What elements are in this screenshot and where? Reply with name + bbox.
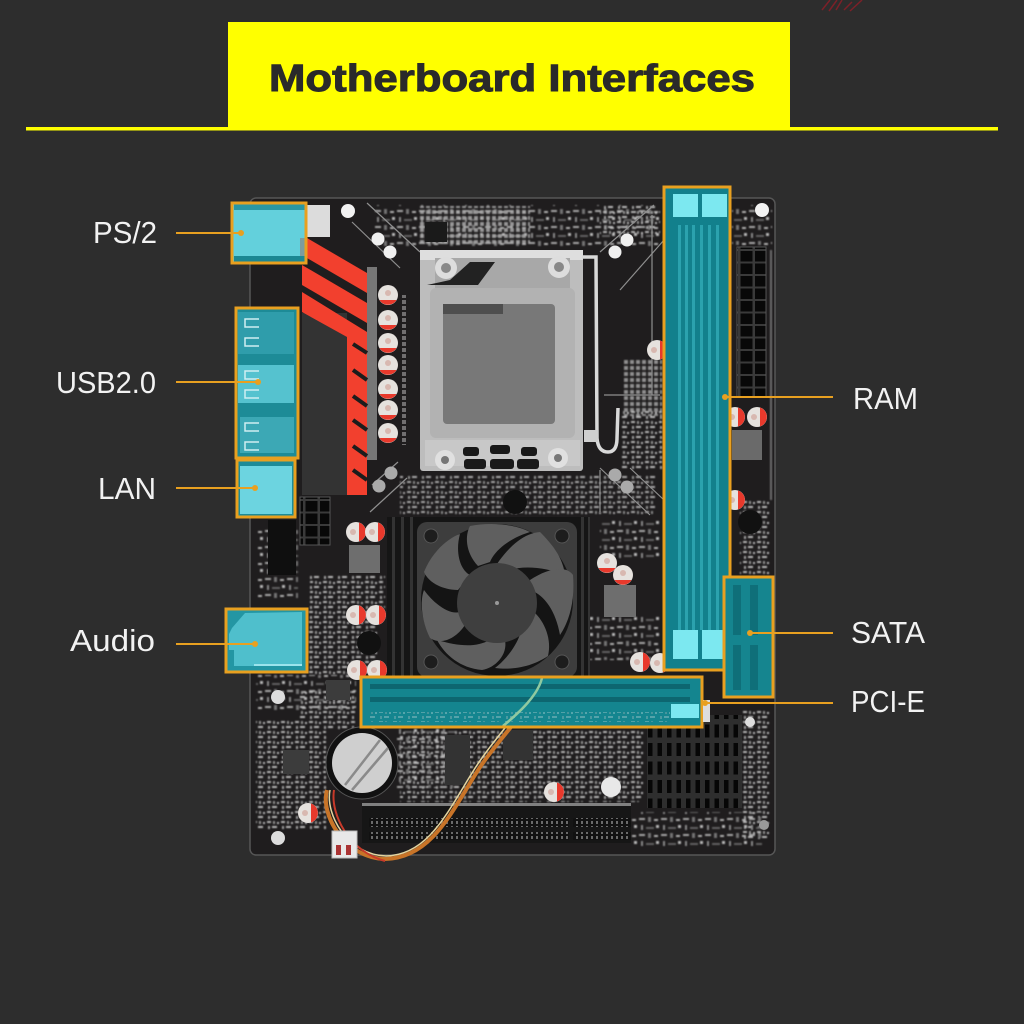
other capacitors [298, 340, 767, 823]
highlight: RAM slots [664, 187, 730, 670]
CPU fan and heatsink [387, 517, 590, 677]
label: LAN [98, 471, 258, 506]
white silkscreen traces [352, 203, 664, 515]
label: SATA [747, 615, 925, 650]
label: SATA: SATA [851, 615, 925, 650]
highlight: SATA [724, 577, 773, 697]
highlight: Audio ports [226, 609, 307, 672]
CMOS battery [326, 727, 398, 799]
inductors and chips [268, 222, 762, 785]
fan wires and plug [326, 680, 542, 861]
label: USB2.0 [56, 365, 261, 400]
power connectors [300, 205, 766, 545]
red VRM heatsink [302, 238, 377, 495]
highlight: PCI-E slot [361, 677, 710, 727]
highlight: USB2.0 ports [236, 308, 298, 458]
label: PS/2: PS/2 [93, 215, 157, 250]
highlight: PS/2 port [232, 203, 306, 263]
label: RAM [722, 381, 918, 416]
label: PCI-E [702, 684, 925, 719]
label: Audio [70, 623, 258, 658]
label: LAN: LAN [98, 471, 156, 506]
chipset heatsink [647, 715, 742, 808]
highlight: LAN port [237, 460, 295, 517]
SMD component texture [256, 205, 772, 848]
CPU socket [420, 250, 618, 471]
label: PCI-E: PCI-E [851, 684, 925, 719]
label: USB2.0: USB2.0 [56, 365, 156, 400]
label: Audio: Audio [70, 623, 155, 658]
title: Motherboard Interfaces [269, 58, 755, 100]
motherboard [250, 198, 775, 861]
PCI slot [362, 803, 631, 843]
VRM capacitors [378, 285, 408, 445]
decorative mark: top right [822, 0, 862, 11]
label: RAM: RAM [853, 381, 918, 416]
label: PS/2 [93, 215, 244, 250]
mounting dots [271, 203, 769, 845]
title banner [26, 22, 998, 130]
